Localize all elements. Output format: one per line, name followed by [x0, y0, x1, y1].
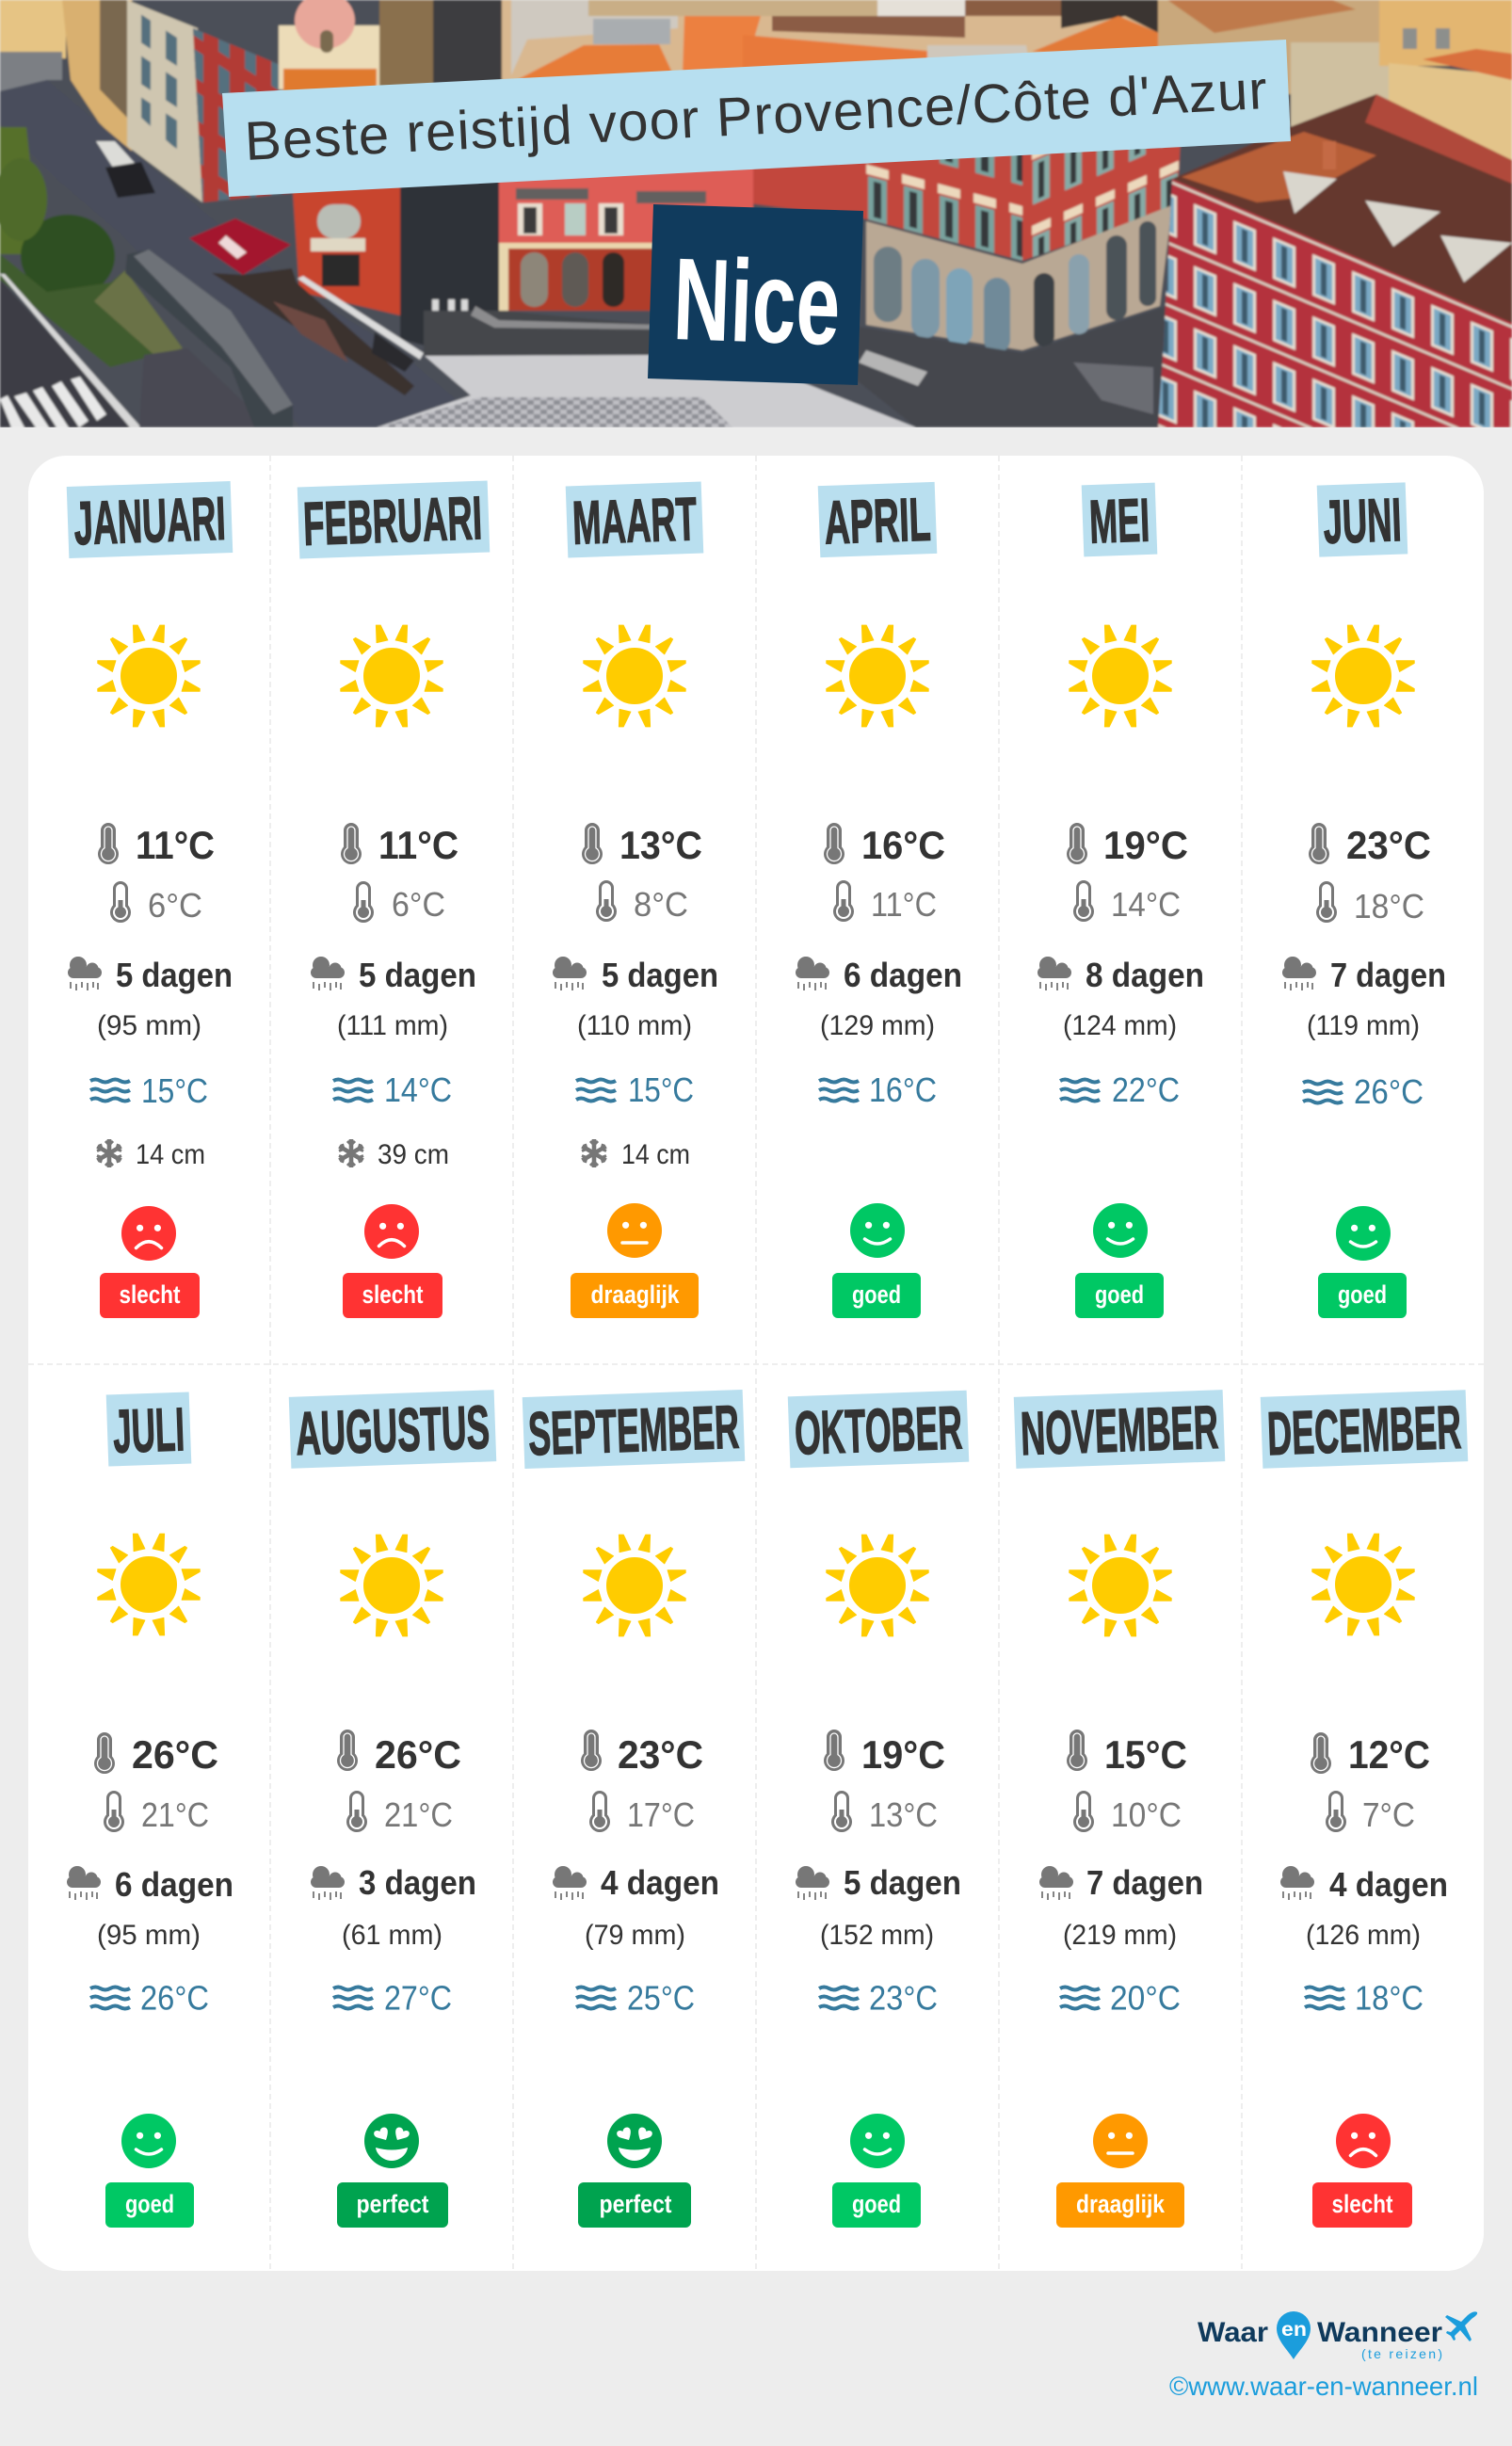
heading: maart: MAART — [571, 484, 698, 557]
grass and tracks — [0, 254, 183, 367]
high temperature: 23°C — [618, 1732, 703, 1777]
rain days: 5 dagen — [602, 956, 718, 994]
rating: goed — [832, 2114, 921, 2228]
rainfall: (110 mm) — [577, 1010, 692, 1041]
rating: draaglijk — [571, 1203, 699, 1318]
rainfall: (219 mm) — [1063, 1920, 1177, 1951]
low temperature — [353, 881, 445, 924]
rating: perfect: perfect — [356, 2190, 429, 2218]
icon: sun — [1070, 625, 1171, 727]
rating: goed: goed — [125, 2190, 174, 2218]
hero photo: aerial view of Place Masséna in Nice — [0, 0, 1512, 427]
high temperature: 26°C — [132, 1732, 218, 1777]
roofs — [502, 0, 1161, 87]
icon: sun — [1312, 625, 1414, 727]
tram — [125, 249, 293, 427]
snow depth — [339, 1139, 449, 1170]
heading: februari: FEBRUARI — [302, 483, 483, 558]
rain days — [67, 1865, 233, 1904]
icon: sun — [98, 1534, 200, 1635]
sea temperature — [333, 1979, 452, 2017]
sea temperature — [819, 1979, 938, 2017]
left pavement — [0, 80, 490, 427]
icon: map pin — [1277, 2311, 1311, 2359]
heading: november — [1014, 1390, 1225, 1469]
rain days: 4 dagen — [601, 1863, 719, 1902]
low temperature — [589, 1791, 695, 1834]
high temperature: 26°C — [375, 1732, 461, 1777]
rainfall: (152 mm) — [820, 1920, 934, 1951]
rain days: 6 dagen — [115, 1865, 233, 1904]
panel: januari — [67, 481, 233, 1318]
awning — [189, 218, 291, 275]
icon: sun — [1312, 1534, 1414, 1635]
sea temperature — [90, 1071, 208, 1110]
rating: perfect: perfect — [599, 2190, 672, 2218]
title banner: Beste reistijd voor Provence/Côte d'Azur — [243, 59, 1268, 172]
website credit: ©www.waar-en-wanneer.nl — [1169, 2372, 1478, 2401]
rainfall: (95 mm) — [97, 1920, 201, 1951]
big curved building on the right — [1158, 179, 1512, 427]
panel: februari — [298, 480, 490, 1318]
rating: slecht: slecht — [1331, 2190, 1393, 2218]
rating: goed — [105, 2114, 194, 2228]
rain days — [1037, 956, 1204, 994]
high temperature — [94, 1732, 218, 1777]
rating: slecht — [343, 1204, 442, 1318]
snow depth — [97, 1139, 205, 1170]
rain days: 7 dagen — [1330, 956, 1446, 994]
sea temperature — [1303, 1072, 1424, 1111]
sea temperature: 22°C — [1112, 1070, 1180, 1109]
rating: goed — [1075, 1203, 1164, 1318]
heading: mei: MEI — [1088, 485, 1150, 556]
high temperature: 19°C — [861, 1732, 945, 1777]
rain days — [1280, 1865, 1448, 1904]
rating: slecht: slecht — [119, 1280, 181, 1309]
panel: november — [1014, 1390, 1225, 2228]
sea temperature — [576, 1979, 695, 2017]
high temperature: 11°C — [378, 823, 458, 867]
sea temperature — [1060, 1979, 1181, 2017]
panel: augustus — [289, 1390, 496, 2228]
heading: januari — [67, 481, 233, 558]
panel: juli — [67, 1392, 233, 2228]
sea temperature: 26°C — [140, 1979, 209, 2017]
high temperature — [824, 1730, 945, 1777]
low temperature — [104, 1791, 209, 1834]
heading: oktober: OKTOBER — [794, 1392, 963, 1468]
sea temperature: 27°C — [384, 1979, 452, 2017]
heading: juni: JUNI — [1322, 485, 1403, 556]
low temperature: 21°C — [384, 1795, 453, 1834]
heading: augustus — [289, 1390, 496, 1469]
rainfall: (124 mm) — [1063, 1010, 1177, 1041]
sea temperature — [1060, 1070, 1180, 1109]
heading: september: SEPTEMBER — [527, 1392, 740, 1468]
right street — [852, 306, 1167, 427]
icon: sun — [584, 625, 685, 727]
rainfall: (95 mm) — [97, 1010, 201, 1041]
rain days — [311, 1863, 476, 1902]
rain days: 5 dagen — [844, 1863, 961, 1902]
icon: sun — [827, 625, 928, 727]
high temperature — [337, 1730, 461, 1777]
high temperature — [1309, 823, 1431, 867]
rain days: 3 dagen — [359, 1863, 476, 1902]
panel: december — [1261, 1390, 1468, 2228]
high temperature: 12°C — [1348, 1732, 1430, 1777]
logo: Waar en Wanneer: en — [1281, 2319, 1307, 2341]
high temperature — [1311, 1732, 1430, 1777]
rain days: 5 dagen — [359, 956, 476, 994]
trees — [0, 127, 36, 254]
rain days: 5 dagen — [116, 956, 233, 994]
rating: goed: goed — [1095, 1280, 1144, 1309]
rating: perfect — [578, 2114, 691, 2228]
rainfall: (119 mm) — [1307, 1010, 1420, 1041]
icon: sun — [827, 1535, 928, 1636]
rain days — [553, 1863, 719, 1902]
heading: april: APRIL — [823, 485, 932, 556]
high temperature — [824, 823, 945, 867]
low temperature — [833, 880, 937, 924]
rain days — [1039, 1863, 1203, 1902]
centre facades — [863, 141, 1022, 261]
low temperature — [596, 880, 688, 924]
rain days: 7 dagen — [1086, 1863, 1203, 1902]
sea temperature: 18°C — [1355, 1979, 1424, 2017]
rating: goed: goed — [1338, 1280, 1387, 1309]
icon: sun — [584, 1535, 685, 1636]
sea temperature: 23°C — [869, 1979, 938, 2017]
arcades — [866, 205, 1172, 350]
high temperature: 11°C — [136, 823, 215, 867]
rating: draaglijk — [1056, 2114, 1184, 2228]
low temperature: 17°C — [627, 1795, 695, 1834]
low temperature — [1073, 1791, 1182, 1834]
high temperature: 13°C — [619, 823, 702, 867]
low temperature: 11°C — [871, 885, 937, 924]
low temperature: 18°C — [1354, 887, 1424, 925]
low temperature — [1073, 880, 1181, 924]
snow depth: 14 cm — [621, 1139, 690, 1170]
heading: maart — [566, 482, 703, 557]
rain days — [796, 956, 962, 994]
low temperature: 6°C — [148, 886, 202, 925]
panel: oktober — [788, 1391, 969, 2228]
low temperature: 10°C — [1111, 1795, 1182, 1834]
sea temperature: 25°C — [627, 1979, 695, 2017]
low temperature — [1326, 1791, 1415, 1834]
low temperature: 7°C — [1362, 1795, 1415, 1834]
high temperature — [1067, 823, 1188, 867]
rating: goed: goed — [852, 2190, 901, 2218]
panel: monthly climate card — [28, 456, 1484, 2271]
top-left buildings — [0, 0, 66, 58]
rating: slecht — [100, 1206, 200, 1318]
rainfall: (126 mm) — [1306, 1920, 1421, 1951]
icon: sun — [98, 625, 200, 727]
high temperature — [341, 823, 458, 867]
heading: juni — [1317, 482, 1407, 557]
icon: sun — [341, 625, 442, 727]
sea temperature: 15°C — [141, 1071, 208, 1110]
sea temperature — [576, 1070, 694, 1109]
rain days: 8 dagen — [1086, 956, 1204, 994]
low temperature — [346, 1791, 453, 1834]
city name block: Nice — [671, 234, 843, 370]
panel: september — [523, 1390, 745, 2228]
high temperature: 19°C — [1103, 823, 1188, 867]
heading: januari: JANUARI — [72, 484, 227, 557]
high temperature — [582, 823, 702, 867]
cafe terrace — [212, 268, 414, 395]
snow depth: 39 cm — [378, 1139, 449, 1170]
heading: mei — [1082, 483, 1157, 556]
sea temperature — [819, 1070, 937, 1109]
rating: draaglijk: draaglijk — [1076, 2190, 1166, 2218]
high temperature — [98, 823, 215, 867]
low temperature — [831, 1791, 938, 1834]
sea temperature: 26°C — [1354, 1072, 1424, 1111]
panel: juni — [1282, 482, 1446, 1318]
icon: sun — [341, 1535, 442, 1636]
logo: Waar en Wanneer: Waar — [1198, 2317, 1268, 2348]
heading: april — [818, 482, 937, 557]
street in the middle — [400, 179, 499, 348]
sea temperature — [1305, 1979, 1424, 2017]
panel: maart — [553, 482, 718, 1318]
heading: juli — [106, 1392, 191, 1467]
rain days — [553, 956, 718, 994]
logo: Waar en Wanneer: Wanneer — [1317, 2317, 1442, 2348]
plaza — [377, 355, 916, 427]
low temperature — [1316, 881, 1424, 925]
high temperature — [581, 1730, 703, 1777]
rain days: 4 dagen — [1329, 1865, 1448, 1904]
high temperature: 16°C — [861, 823, 945, 867]
low temperature: 6°C — [392, 885, 445, 924]
sea temperature — [333, 1070, 452, 1109]
heading: november: NOVEMBER — [1020, 1392, 1219, 1468]
heading: juli: JULI — [112, 1394, 185, 1466]
rainfall: (79 mm) — [585, 1920, 685, 1951]
icon: sun — [1070, 1535, 1171, 1636]
rain days — [1282, 956, 1446, 994]
high temperature: 15°C — [1104, 1732, 1187, 1777]
rain days — [68, 956, 233, 994]
logo: Waar en Wanneer: (te reizen) — [1361, 2346, 1442, 2361]
red corner building — [293, 186, 400, 315]
heading: augustus: AUGUSTUS — [295, 1392, 491, 1468]
sea temperature: 16°C — [869, 1070, 937, 1109]
rating: goed: goed — [852, 1280, 901, 1309]
panel: mei — [1037, 483, 1204, 1318]
snow depth — [582, 1139, 690, 1170]
rainfall: (61 mm) — [342, 1920, 442, 1951]
low temperature: 8°C — [634, 885, 688, 924]
high temperature — [1067, 1730, 1187, 1777]
rainfall: (111 mm) — [337, 1010, 448, 1041]
sea temperature: 14°C — [384, 1070, 452, 1109]
low temperature — [110, 881, 202, 925]
low temperature: 14°C — [1111, 885, 1181, 924]
crosswalk — [14, 393, 49, 427]
snow depth: 14 cm — [136, 1139, 205, 1170]
icon: airplane — [1445, 2311, 1477, 2341]
top right — [1158, 0, 1379, 94]
heading: oktober — [788, 1391, 969, 1468]
sea temperature: 15°C — [628, 1070, 694, 1109]
rating: perfect — [337, 2114, 448, 2228]
sea temperature — [90, 1979, 209, 2017]
rain days — [311, 956, 476, 994]
rating: slecht — [1312, 2114, 1412, 2228]
title banner — [222, 40, 1291, 197]
city name block — [648, 204, 863, 385]
heading: september — [523, 1390, 745, 1469]
rating: slecht: slecht — [362, 1280, 424, 1309]
rainfall: (129 mm) — [820, 1010, 935, 1041]
heading: februari — [298, 480, 490, 559]
rating: goed — [832, 1203, 921, 1318]
rain days — [796, 1863, 961, 1902]
panel: april — [796, 482, 962, 1318]
rating: draaglijk: draaglijk — [591, 1280, 680, 1309]
low temperature: 13°C — [869, 1795, 938, 1834]
sea temperature: 20°C — [1110, 1979, 1181, 2017]
high temperature: 23°C — [1346, 823, 1431, 867]
rain days: 6 dagen — [844, 956, 962, 994]
rating: goed — [1318, 1206, 1407, 1318]
logo: Waar en Wanneer — [1198, 2311, 1477, 2361]
low temperature: 21°C — [141, 1795, 209, 1834]
